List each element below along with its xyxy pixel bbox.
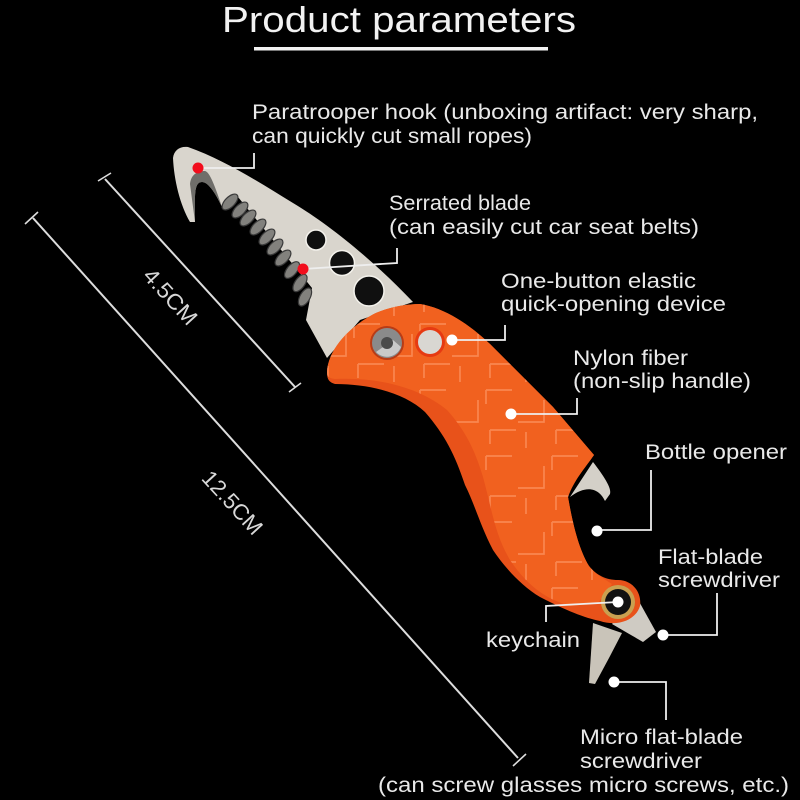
dimension: blade length 4.5CM <box>98 173 301 392</box>
callout: bottle opener <box>592 440 787 536</box>
callout: quick-opening device <box>446 269 726 346</box>
knife illustration <box>173 147 656 684</box>
pivot screw <box>370 326 404 360</box>
title: Product parameters <box>222 0 576 40</box>
callout: serrated blade <box>298 191 699 274</box>
callout: nylon fiber handle: Nylon fiber <box>573 346 688 370</box>
callout: keychain: keychain <box>486 628 580 652</box>
callout: nylon fiber handle <box>506 346 751 420</box>
release button <box>415 327 445 357</box>
callout: paratrooper hook: Paratrooper hook (unboxing artifact: very sharp, <box>252 100 758 124</box>
dimension: blade length 4.5CM: 4.5CM <box>138 263 203 330</box>
callout: serrated blade: (can easily cut car seat belts) <box>389 215 699 239</box>
callout: serrated blade: Serrated blade <box>389 191 531 215</box>
callout: flat-blade screwdriver: Flat-blade <box>658 545 763 569</box>
callout: keychain <box>486 596 624 652</box>
bottle opener blade <box>570 462 610 501</box>
callout: paratrooper hook <box>192 100 758 174</box>
blade <box>173 147 413 358</box>
callout: micro flat-blade screwdriver: Micro flat-blade <box>580 725 743 749</box>
blade holes <box>306 230 384 306</box>
handle <box>327 304 640 623</box>
callout: nylon fiber handle: (non-slip handle) <box>573 369 751 393</box>
callout: bottle opener: Bottle opener <box>645 440 787 464</box>
serrated edge <box>219 191 314 308</box>
micro flat-blade screwdriver <box>589 623 622 684</box>
callout: micro flat-blade screwdriver <box>378 676 789 797</box>
flat-blade screwdriver <box>612 596 656 642</box>
callout: flat-blade screwdriver: screwdriver <box>658 568 780 592</box>
callout: flat-blade screwdriver <box>658 545 780 640</box>
hook inner shade <box>190 171 222 222</box>
keychain ring <box>601 585 635 619</box>
callout: quick-opening device: One-button elastic <box>501 269 696 293</box>
callout: quick-opening device: quick-opening device <box>501 292 726 316</box>
callout: micro flat-blade screwdriver: (can screw glasses micro screws, etc.) <box>378 773 789 797</box>
dimension: total length 12.5CM: 12.5CM <box>197 465 268 540</box>
callout: paratrooper hook: can quickly cut small ropes) <box>252 124 532 148</box>
callout: micro flat-blade screwdriver: screwdriver <box>580 749 702 773</box>
